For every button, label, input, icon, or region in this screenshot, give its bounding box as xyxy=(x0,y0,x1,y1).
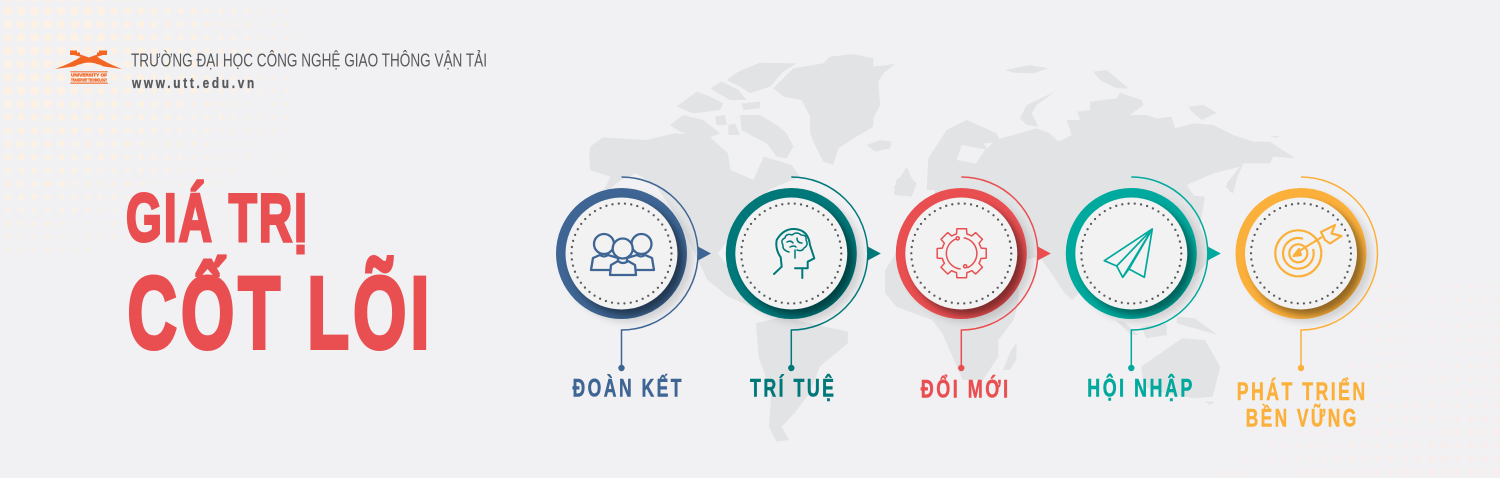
step 5: phát triển bền vững xyxy=(1236,177,1378,371)
logo xyxy=(55,50,122,84)
step 5 label: PHÁT TRIỂN xyxy=(1237,377,1368,406)
step 2: trí tuệ xyxy=(726,177,881,371)
header: school name: TRƯỜNG ĐẠI HỌC CÔNG NGHỆ GIAO THÔNG VẬN TẢI xyxy=(131,50,487,70)
step 3 label: ĐỔI MỚI xyxy=(921,374,1011,404)
logo university text: UNIVERSITY OF xyxy=(71,72,107,78)
step 1: đoàn kết xyxy=(556,177,711,371)
halftone dots bottom right xyxy=(1200,285,1500,478)
icon: gear xyxy=(937,229,986,278)
step 4 label: HỘI NHẬP xyxy=(1087,373,1195,403)
step 5 badge xyxy=(1236,177,1378,371)
world map xyxy=(589,54,1295,442)
step 5 label xyxy=(1237,377,1368,433)
logo university text xyxy=(70,72,108,84)
step 2 badge xyxy=(726,177,881,371)
logo university text: TRANSPORT TECHNOLOGY xyxy=(71,77,107,83)
step 2 label: TRÍ TUỆ xyxy=(750,373,836,403)
title line 1: GIÁ TRỊ xyxy=(126,180,309,256)
step 1 badge xyxy=(556,177,711,371)
step 4 badge xyxy=(1066,177,1221,371)
icon: people xyxy=(591,234,654,275)
step 4: hội nhập xyxy=(1066,177,1221,371)
halftone dots top left xyxy=(0,0,325,290)
logo bridge mark xyxy=(55,50,122,69)
step 1 label: ĐOÀN KẾT xyxy=(572,374,684,403)
header: website: www.utt.edu.vn xyxy=(131,75,257,92)
step 5 label: BỀN VỮNG xyxy=(1246,403,1359,433)
icon: paper plane xyxy=(1104,229,1152,277)
icon: head with brain xyxy=(774,229,814,278)
step 3 badge xyxy=(896,177,1051,371)
title line 2: CỐT LÕI xyxy=(128,256,434,370)
icon: target with arrow xyxy=(1275,225,1342,276)
step 3: đổi mới xyxy=(896,177,1051,371)
